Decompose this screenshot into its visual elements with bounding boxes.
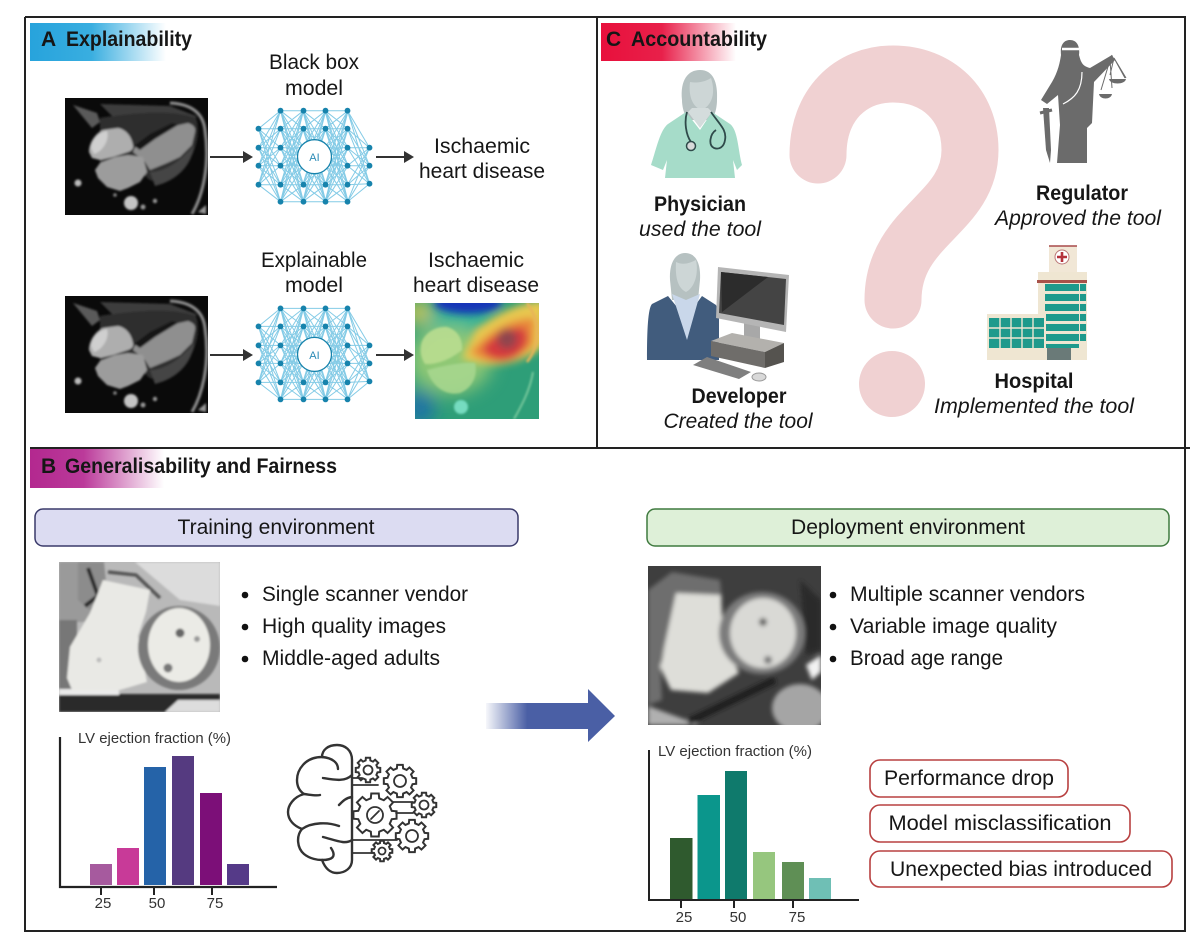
list: deployment environment bullets: [830, 583, 1085, 670]
label: Explainable model: Explainable: [261, 249, 367, 272]
arrow: MRI to black box: [210, 151, 253, 163]
label: Hospital Implemented the tool: Implemented the tool: [934, 395, 1135, 418]
bar chart: deployment LV ejection fraction: [649, 743, 859, 926]
label: Hospital Implemented the tool: Hospital: [994, 370, 1074, 393]
icon: regulator, lady justice: [1040, 40, 1126, 163]
panel: A Explainability: [30, 23, 545, 426]
label: Ischaemic heart disease, top: Ischaemic: [434, 135, 530, 158]
label: Explainable model: model: [285, 274, 343, 297]
callout: Unexpected bias introduced: Unexpected bias introduced: [890, 858, 1152, 881]
heading: C Accountability: C: [606, 28, 621, 51]
heading: B Generalisability and Fairness: Generalisability and Fairness: [65, 455, 337, 478]
bar chart: deployment LV ejection fraction: LV ejection fraction (%): [658, 743, 812, 760]
panel: C Accountability: [601, 23, 1162, 433]
list: deployment environment bullets: Multiple scanner vendors: [850, 583, 1085, 606]
callout: Model misclassification: Model misclassification: [888, 812, 1112, 835]
bar chart: training LV ejection fraction: 25: [95, 895, 111, 912]
header: Deployment environment: Deployment environment: [791, 516, 1025, 539]
heading: A Explainability: A: [41, 28, 56, 51]
label: Black box model: Black box: [269, 51, 359, 74]
label: Hospital Implemented the tool: [934, 370, 1135, 418]
arrow: training to deployment: [486, 689, 615, 742]
label: Physician used the tool: used the tool: [639, 218, 762, 241]
list: training environment bullets: [242, 583, 468, 670]
callout: Unexpected bias introduced: [870, 851, 1172, 887]
bar chart: training LV ejection fraction: LV ejection fraction (%): [78, 730, 231, 747]
header: Training environment: Training environment: [178, 516, 375, 539]
label: Explainable model: [261, 249, 367, 297]
label: Regulator Approved the tool: [993, 182, 1162, 230]
label: Black box model: model: [285, 77, 343, 100]
image: cardiac MRI, top row: [65, 98, 208, 215]
heading: B Generalisability and Fairness: [30, 449, 337, 488]
heading: C Accountability: Accountability: [631, 28, 767, 51]
bar chart: deployment LV ejection fraction: 75: [789, 909, 805, 926]
list: training environment bullets: Middle-aged adults: [262, 647, 440, 670]
icon: developer at computer: [647, 253, 789, 381]
bar chart: training LV ejection fraction: 50: [149, 895, 165, 912]
list: training environment bullets: High quality images: [262, 615, 446, 638]
arrow: MRI to explainable model: [210, 349, 253, 361]
bar chart: deployment LV ejection fraction: 50: [730, 909, 746, 926]
heading: B Generalisability and Fairness: B: [41, 455, 56, 478]
label: Ischaemic heart disease, bottom: [413, 249, 539, 297]
callout: Performance drop: [870, 760, 1068, 797]
icon: hospital building: [987, 246, 1087, 360]
label: Ischaemic heart disease, bottom: heart disease: [413, 274, 539, 297]
image: training short-axis MRI: [59, 562, 220, 712]
header: Training environment: [35, 509, 518, 546]
label: Developer Created the tool: Created the tool: [664, 410, 814, 433]
label: Regulator Approved the tool: Regulator: [1036, 182, 1128, 205]
label: Black box model: [269, 51, 359, 100]
list: deployment environment bullets: Variable image quality: [850, 615, 1057, 638]
list: deployment environment bullets: Broad age range: [850, 647, 1003, 670]
bar chart: training LV ejection fraction: [60, 730, 277, 912]
label: Physician used the tool: Physician: [654, 193, 746, 216]
callout: Model misclassification: [870, 805, 1130, 842]
diagram: explainable neural network: AI: [309, 350, 320, 362]
icon: large question mark: [818, 74, 970, 417]
heading: A Explainability: Explainability: [66, 28, 192, 51]
icon: physician: [651, 70, 742, 178]
label: Physician used the tool: [639, 193, 762, 241]
label: Developer Created the tool: [664, 385, 814, 433]
icon: brain with gears: [288, 745, 436, 873]
image: heatmap over MRI: [415, 303, 539, 419]
arrow: black box to diagnosis: [376, 151, 414, 163]
image: deployment short-axis MRI: [648, 566, 828, 732]
heading: C Accountability: [601, 23, 767, 61]
list: training environment bullets: Single scanner vendor: [262, 583, 468, 606]
panel: B Generalisability and Fairness: [30, 449, 1172, 926]
bar chart: training LV ejection fraction: 75: [207, 895, 223, 912]
image: cardiac MRI, bottom row: [65, 296, 208, 413]
label: Ischaemic heart disease, top: [419, 135, 545, 183]
label: Ischaemic heart disease, top: heart disease: [419, 160, 545, 183]
header: Deployment environment: [647, 509, 1169, 546]
diagram: black box neural network: AI: [309, 152, 320, 164]
label: Regulator Approved the tool: Approved the tool: [993, 207, 1162, 230]
label: Developer Created the tool: Developer: [692, 385, 786, 408]
diagram: black box neural network: [256, 108, 372, 205]
heading: A Explainability: [30, 23, 192, 61]
label: Ischaemic heart disease, bottom: Ischaemic: [428, 249, 524, 272]
diagram: explainable neural network: [256, 306, 372, 402]
bar chart: deployment LV ejection fraction: 25: [676, 909, 692, 926]
arrow: explainable model to heatmap: [376, 349, 414, 361]
callout: Performance drop: Performance drop: [884, 767, 1054, 790]
